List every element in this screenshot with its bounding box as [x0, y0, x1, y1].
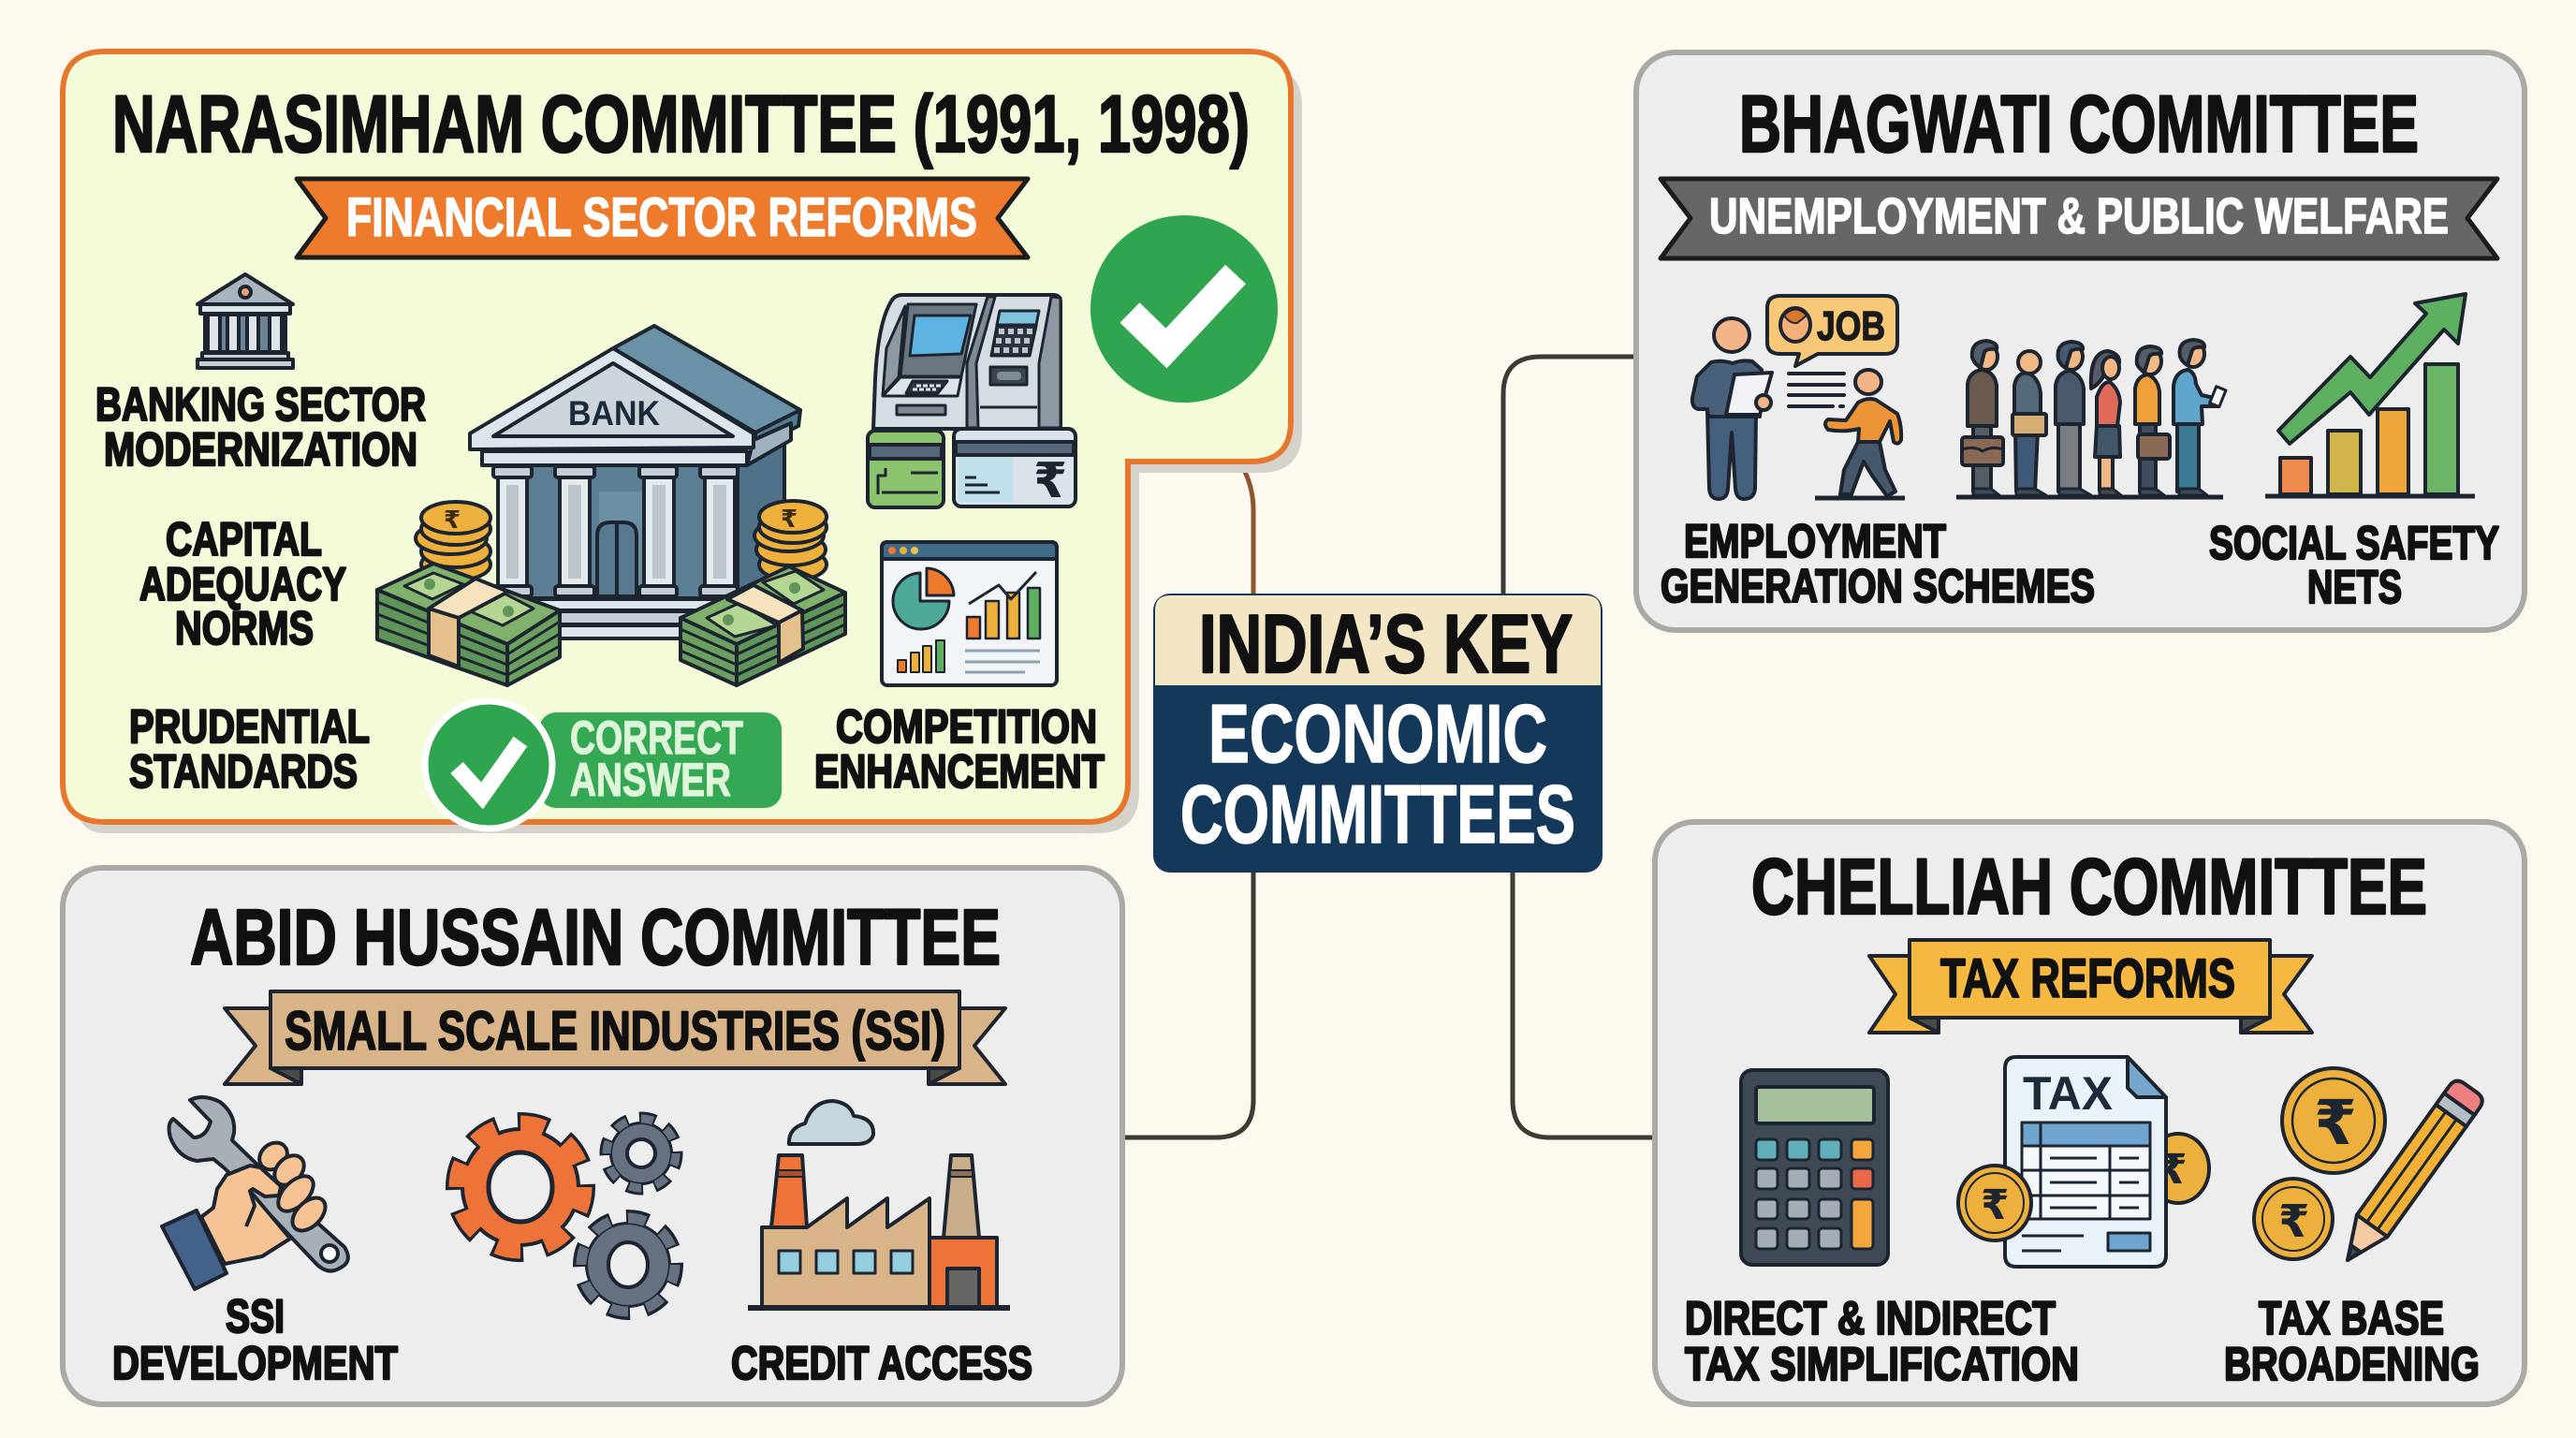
- icon: walking applicant: [1815, 370, 1905, 498]
- icon: ATM machines: [873, 295, 1061, 429]
- ribbon: unemployment and public welfare: [1661, 179, 2497, 258]
- icon: small bank temple: [198, 274, 293, 368]
- ribbon: small scale industries: SMALL SCALE INDUSTRIES (SSI): [285, 1001, 945, 1062]
- label: employment generation schemes: [1661, 515, 2095, 612]
- connector: Abid Hussain to center: [1122, 871, 1253, 1137]
- label: direct and indirect tax simplification: [1685, 1292, 2079, 1390]
- label: social safety nets: [2209, 517, 2499, 613]
- icon: factory: [748, 1101, 1010, 1308]
- panel: Chelliah committee: [1655, 822, 2525, 1404]
- icon: recruiter with clipboard: [1692, 318, 1772, 499]
- icon: calculator: [1741, 1070, 1888, 1265]
- badge: correct answer: ANSWER: [570, 754, 731, 806]
- label: prudential standards: [129, 700, 370, 798]
- gear: medium grey: [581, 1218, 675, 1312]
- badge: correct answer: [425, 701, 782, 829]
- text: INDIA'S KEY: INDIA’S KEY: [1199, 597, 1573, 690]
- coin: large: ₹: [2314, 1088, 2357, 1157]
- icon: job speech bubble: JOB: [1817, 303, 1885, 349]
- label: capital adequacy norms: [139, 513, 346, 654]
- label: capital adequacy norms: NORMS: [175, 602, 314, 654]
- coin: front: [1958, 1166, 2031, 1240]
- icon: bank cards: [868, 429, 1076, 508]
- person 6: [2174, 340, 2226, 495]
- text: ECONOMIC COMMITTEES: COMMITTEES: [1180, 768, 1575, 860]
- label: banking sector modernization: MODERNIZATION: [104, 423, 417, 476]
- person 1: [1962, 341, 2003, 495]
- label: SSI development: SSI: [226, 1290, 285, 1343]
- label: SSI development: DEVELOPMENT: [112, 1337, 398, 1389]
- label: social safety nets: NETS: [2307, 561, 2402, 613]
- label: employment generation schemes: GENERATION SCHEMES: [1661, 560, 2095, 612]
- label: prudential standards: PRUDENTIAL: [129, 700, 370, 753]
- panel: Narasimham committee: [63, 51, 1302, 833]
- heading: Abid Hussain: ABID HUSSAIN COMMITTEE: [190, 893, 1001, 981]
- badge: correct answer: CORRECT: [570, 712, 743, 764]
- ribbon: small scale industries: [225, 991, 1005, 1084]
- icon: gears: [457, 1119, 676, 1312]
- person 3: [2056, 342, 2091, 495]
- label: direct and indirect tax simplification: TAX SIMPLIFICATION: [1685, 1338, 2079, 1390]
- coin: large: [2282, 1068, 2385, 1173]
- label: tax base broadening: [2224, 1292, 2480, 1390]
- heading: Narasimham: NARASIMHAM COMMITTEE (1991, 1998): [112, 80, 1250, 169]
- connector: Bhagwati to center: [1503, 357, 1636, 595]
- text: BANK sign: BANK: [568, 394, 660, 433]
- coin: behind document: ₹: [2159, 1147, 2188, 1193]
- label: credit access: CREDIT ACCESS: [731, 1337, 1032, 1389]
- label: direct and indirect tax simplification: DIRECT & INDIRECT: [1685, 1292, 2056, 1344]
- label: banking sector modernization: [95, 378, 426, 476]
- icon: left cash stack: [377, 564, 560, 685]
- coin: behind document: [2147, 1134, 2209, 1203]
- label: employment generation schemes: EMPLOYMENT: [1684, 515, 1946, 567]
- gear: orange: [457, 1123, 584, 1251]
- icon: right coin stack: [754, 501, 827, 580]
- icon: coins and pencil: [2254, 1068, 2486, 1271]
- icon: central bank building: [470, 326, 800, 638]
- icon: job speech bubble: [1767, 296, 1897, 366]
- ribbon: financial sector reforms: [297, 179, 1028, 257]
- label: tax base broadening: TAX BASE: [2259, 1292, 2444, 1344]
- icon: hand holding wrench: [162, 1097, 348, 1289]
- panel: Bhagwati committee: [1636, 52, 2525, 630]
- icon: left coin stack: [416, 502, 490, 580]
- label: capital adequacy norms: ADEQUACY: [139, 558, 346, 610]
- connector: Chelliah to center: [1513, 871, 1655, 1137]
- label: capital adequacy norms: CAPITAL: [166, 513, 322, 565]
- label: competition enhancement: ENHANCEMENT: [814, 745, 1105, 798]
- icon: tax document with coins: [1958, 1057, 2209, 1267]
- ribbon: tax reforms: [1869, 940, 2312, 1033]
- text: ECONOMIC COMMITTEES: [1180, 687, 1575, 860]
- label: social safety nets: SOCIAL SAFETY: [2209, 517, 2499, 569]
- document: [2005, 1057, 2166, 1267]
- gear: small grey: [607, 1119, 676, 1188]
- icon: analytics dashboard: [882, 542, 1057, 685]
- label: SSI development: [112, 1290, 398, 1389]
- label: banking sector modernization: BANKING SECTOR: [95, 378, 426, 431]
- ribbon: financial sector reforms: FINANCIAL SECTOR REFORMS: [346, 187, 977, 248]
- person 5: [2135, 346, 2170, 495]
- pencil: [2333, 1078, 2486, 1271]
- document: TAX: [2023, 1067, 2113, 1120]
- icon: left coin stack: ₹: [444, 506, 461, 534]
- ribbon: tax reforms: TAX REFORMS: [1940, 948, 2235, 1009]
- person 4: [2091, 351, 2121, 495]
- label: tax base broadening: BROADENING: [2224, 1338, 2480, 1390]
- icon: right coin stack: ₹: [781, 505, 798, 533]
- panel: Abid Hussain committee: [63, 868, 1122, 1404]
- icon: large green check: [1090, 215, 1278, 403]
- icon: job description lines: [1789, 374, 1844, 406]
- chart: rising bars with arrow: [2265, 294, 2475, 496]
- person 2: [2012, 351, 2046, 495]
- connector: Narasimham to center: [1237, 459, 1253, 595]
- label: competition enhancement: [814, 700, 1105, 798]
- icon: right cash stack: [681, 566, 845, 685]
- coin: front: ₹: [1981, 1182, 2010, 1228]
- label: competition enhancement: COMPETITION: [836, 700, 1097, 753]
- coin: small: [2254, 1179, 2333, 1259]
- label: prudential standards: STANDARDS: [129, 745, 358, 798]
- panel: central title box: [1153, 594, 1603, 873]
- coin: small: ₹: [2278, 1197, 2309, 1247]
- text: ECONOMIC COMMITTEES: ECONOMIC: [1208, 687, 1547, 780]
- icon: queue of job seekers: [1956, 340, 2226, 497]
- icon: bank cards: ₹: [1033, 454, 1067, 508]
